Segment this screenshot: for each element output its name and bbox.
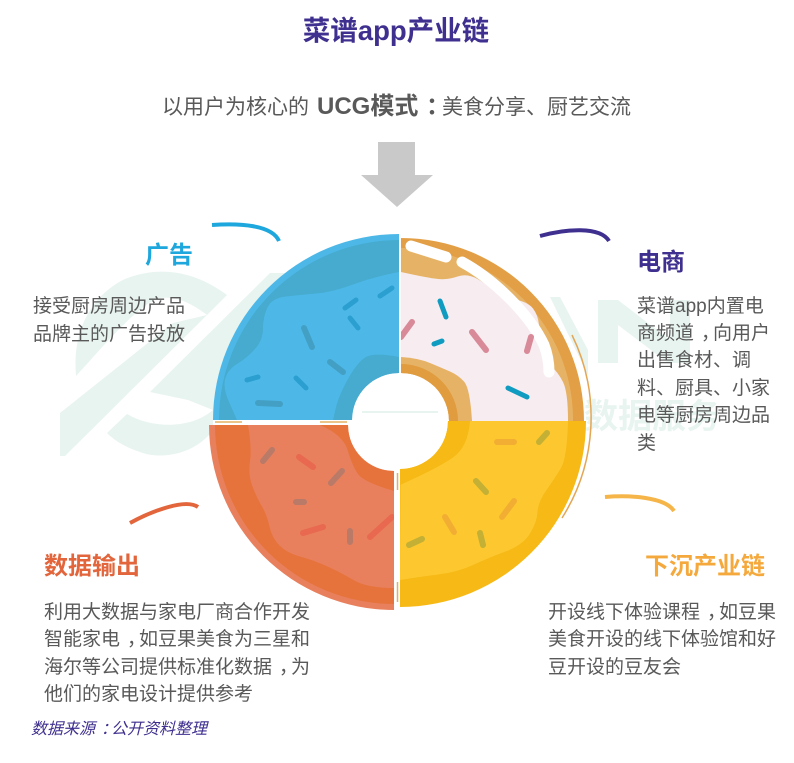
text: e-commerce: 出售食材、调: [637, 349, 751, 371]
text: data output: 智能家电 ，如豆果美食为三星和: [44, 629, 310, 650]
text: e-commerce: 电等厨房周边品: [637, 404, 770, 426]
text: e-commerce: 料、厨具、小家: [637, 377, 770, 399]
curve: yellow accent: [605, 496, 674, 511]
title: 菜谱app产业链: [303, 15, 489, 46]
subtitle: UCG模式: [317, 93, 418, 120]
donut segment: e-commerce (pink): [401, 238, 584, 421]
curve: orange accent: [130, 504, 198, 523]
text: data output: 海尔等公司提供标准化数据 ，为: [44, 657, 310, 678]
subtitle: 以用户为核心的: [162, 96, 309, 119]
subtitle: 美食分享、厨艺交流: [442, 96, 631, 119]
donut segment: downstream (yellow): [398, 421, 590, 611]
text: e-commerce: 菜谱app内置电: [637, 295, 764, 317]
heading: data output: 数据输出: [44, 553, 140, 580]
heading: downstream: 下沉产业链: [645, 553, 765, 580]
curve: blue accent: [212, 224, 279, 241]
text: downstream: 豆开设的豆友会: [548, 656, 681, 678]
text: data output: 利用大数据与家电厂商合作开发: [44, 601, 310, 623]
text: downstream: 美食开设的线下体验馆和好: [548, 628, 776, 650]
text: advertising: 品牌主的广告投放: [33, 323, 185, 345]
text: data output: 他们的家电设计提供参考: [44, 683, 253, 705]
curve: purple accent: [540, 230, 609, 241]
subtitle: ：: [426, 93, 450, 120]
donut segment: data output (orange): [205, 425, 395, 615]
text: e-commerce: 类: [637, 432, 656, 454]
text: e-commerce: 商频道 ，向用户: [637, 323, 770, 344]
arrow: pointing down: [361, 142, 433, 207]
watermark logo: [60, 272, 720, 456]
text: downstream: 开设线下体验课程 ，如豆果: [548, 602, 776, 623]
thin outer rim: [562, 335, 591, 518]
strip between segments: [215, 422, 398, 602]
donut segment: advertising (blue): [213, 234, 399, 420]
heading: advertising: 广告: [145, 242, 193, 269]
watermark logo: 数据服务: [584, 398, 720, 436]
text: advertising: 接受厨房周边产品: [33, 295, 185, 317]
heading: e-commerce: 电商: [637, 249, 685, 276]
source note: 数据来源 ：公开资料整理: [31, 720, 209, 738]
